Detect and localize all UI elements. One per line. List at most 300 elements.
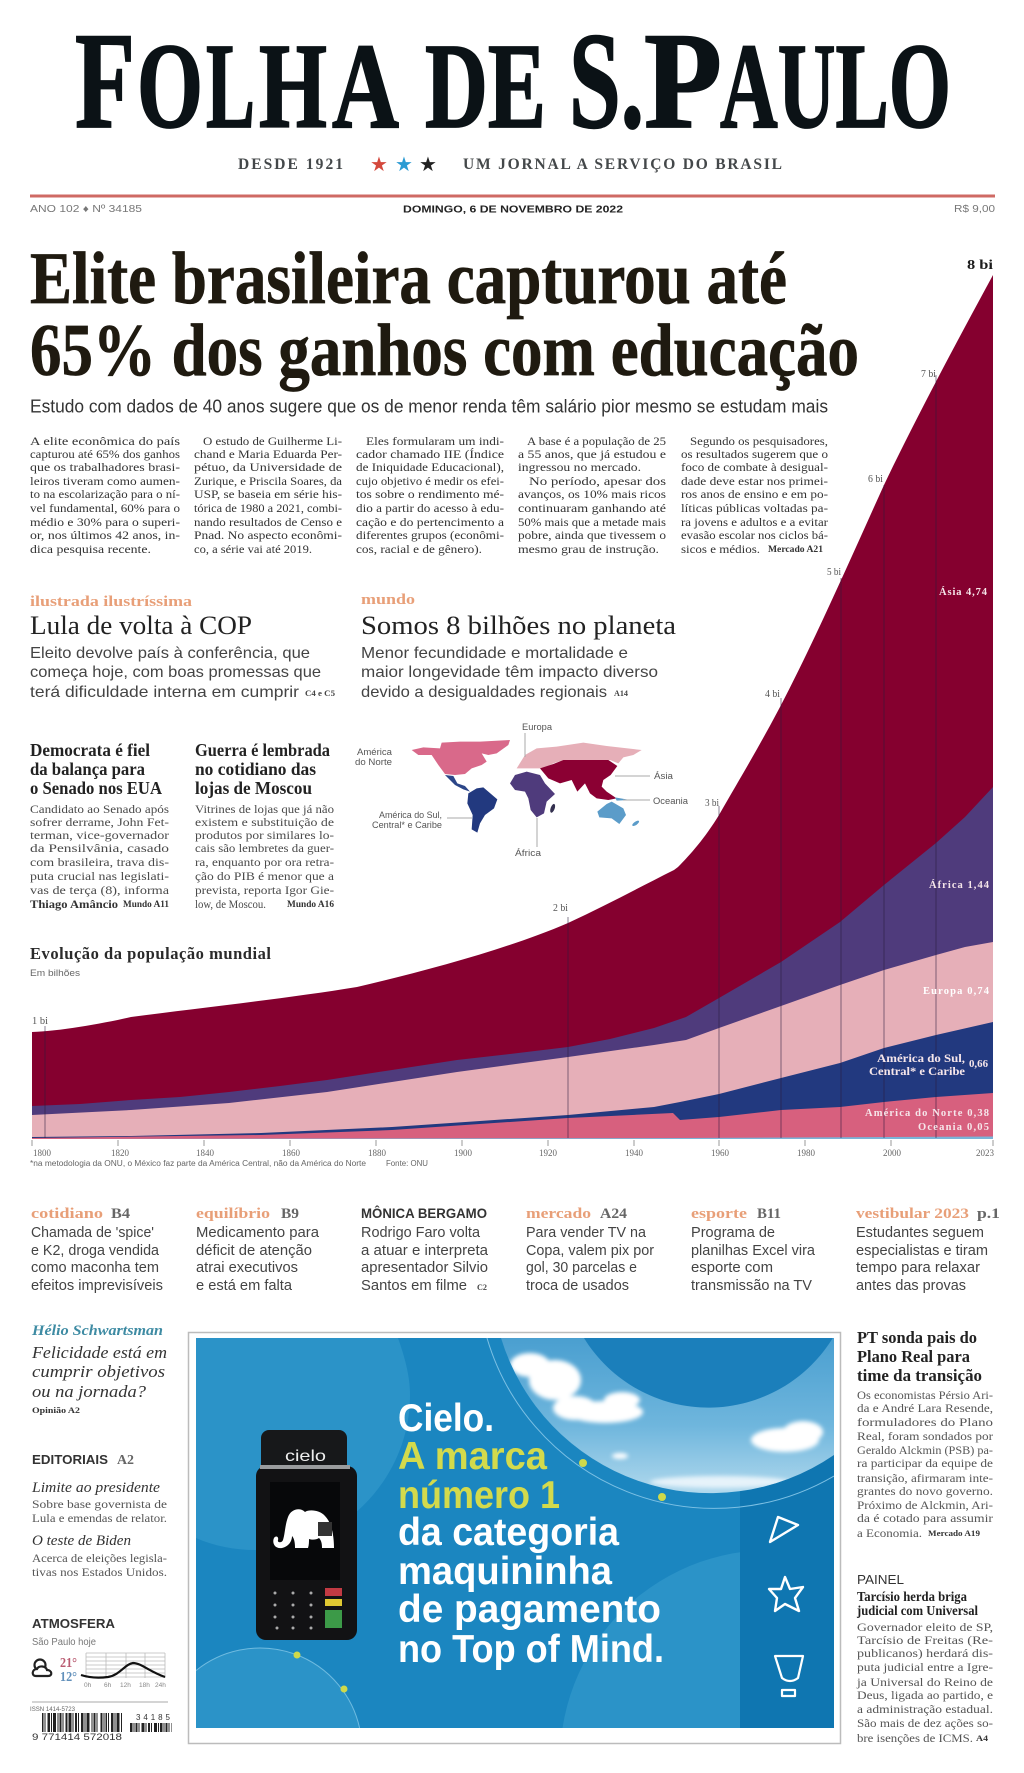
x axis year labels: 1860 (282, 1148, 300, 1158)
right column: Painel: São mais de dez ações so- (857, 1716, 993, 1730)
right column: Painel (856, 1572, 993, 1745)
brief: Mônica Bergamo: a atuar e interpreta (361, 1243, 489, 1259)
x axis year labels: 1840 (196, 1148, 214, 1158)
map continents (412, 740, 642, 833)
text column 3: tos sobre o rendimento mé- (356, 487, 504, 501)
text column 5 (681, 434, 828, 556)
story: Guerra Moscou: Vitrines de lojas que já não (195, 802, 334, 816)
story: Democrata Senado: vas de terça (8), informa (30, 883, 170, 897)
brief: mercado: A24 (600, 1206, 627, 1222)
terminal keypad (274, 1592, 312, 1630)
left column: editorials: Lula e emendas de relator. (32, 1511, 167, 1525)
main headline (30, 238, 859, 392)
left column: editorials: Limite ao presidente (31, 1480, 161, 1496)
text column 2: pétuo, da Universidade de (194, 460, 342, 474)
x axis year labels: 1980 (797, 1148, 816, 1158)
right column: PT story: time da transição (857, 1366, 982, 1385)
text column 5: ra jovens e adultos e a evitar (681, 515, 828, 529)
map region: Asia (540, 760, 617, 800)
text column 5: ros anos de ensino e em po- (681, 487, 828, 501)
decorative thin arc (487, 1338, 834, 1508)
billion marker labels (32, 257, 993, 1027)
icon: elephant (273, 1509, 334, 1548)
text column 2: tórica de 1980 a 2021, combi- (194, 501, 342, 515)
right column: PT story: Real, foram sondados por (857, 1429, 993, 1443)
weather panel: ATMOSFERA (32, 1616, 116, 1631)
temperature chart hours (84, 1682, 166, 1689)
barcode block: ISSN 1414-5723 (30, 1706, 75, 1713)
edition line: ANO 102 ♦ Nº 34185 (30, 204, 143, 215)
brief: cotidiano (31, 1206, 163, 1294)
story teaser: Lula COP: C4 e C5 (305, 689, 335, 698)
left column: editorials (31, 1452, 167, 1579)
icon: three stars: ★ (370, 152, 388, 176)
temperature chart hours: 24h (155, 1682, 166, 1689)
story: Democrata Senado: Candidato ao Senado após (30, 802, 169, 816)
brief: cotidiano: B4 (111, 1206, 130, 1222)
text column 3: cujo objetivo é medir os efei- (356, 474, 504, 488)
weather panel (32, 1616, 166, 1689)
ad headline: no Top of Mind. (398, 1628, 664, 1671)
story: Democrata Senado (30, 740, 170, 911)
right column: PT story (857, 1328, 993, 1540)
chart footnote and source: *na metodologia da ONU, o México faz parte da América Central, não da América do Norte (30, 1159, 367, 1168)
sky crescent with clouds (490, 1338, 840, 1498)
text column 5: os resultados sugerem que o (681, 447, 828, 461)
brief: esporte (691, 1206, 816, 1294)
story: Democrata Senado: com brasileira, trava dis- (30, 855, 169, 869)
brief: Mônica Bergamo: Rodrigo Faro volta (361, 1225, 481, 1241)
story: Guerra Moscou: cais são lembretes da guer- (195, 841, 334, 855)
left column: editorials: A2 (117, 1452, 134, 1467)
billion marker labels: 6 bi (868, 474, 883, 485)
ad dots (294, 1459, 666, 1692)
left column: opinion: ou na jornada? (32, 1382, 147, 1401)
billion marker labels: 4 bi (765, 689, 780, 700)
brief: esporte: B11 (757, 1206, 781, 1222)
brief: cotidiano: e K2, droga vendida (31, 1243, 160, 1259)
temperature chart grid (86, 1653, 165, 1678)
subheadline: Estudo com dados de 40 anos sugere que os de menor renda têm salário pior mesmo se estudam mais (30, 396, 828, 416)
text column 4: avanços, os 10% mais ricos (518, 487, 666, 501)
region value labels: Central* e Caribe (869, 1066, 965, 1078)
text column 2: O estudo de Guilherme Li- (203, 434, 342, 448)
left column: opinion: Felicidade está em (31, 1343, 167, 1362)
story: Guerra Moscou: prevista, reporta Igor Gie- (195, 883, 334, 897)
left column: opinion: Hélio Schwartsman (31, 1323, 163, 1339)
story: Democrata Senado: da balança para (30, 759, 145, 779)
story: Guerra Moscou: ra, enquanto por ora retra- (195, 855, 334, 869)
story: Democrata Senado: puta crucial nas legislati- (30, 869, 169, 883)
text column 5: dade deve estar nos primei- (681, 474, 828, 488)
text column 3: cação e do pertencimento a (356, 515, 505, 529)
text column 2: nando resultados de Censo e (194, 515, 342, 529)
masthead: tagline with stars: DESDE 1921 (238, 156, 343, 173)
left column: opinion: cumprir objetivos (32, 1362, 165, 1381)
map labels: Oceania (653, 796, 688, 806)
masthead: tagline with stars: UM JORNAL A SERVIÇO DO BRASIL (463, 156, 782, 173)
text column 3 (356, 434, 505, 556)
ad headline: de pagamento (398, 1588, 661, 1631)
text column 4: A base é a população de 25 (527, 434, 666, 448)
left column: opinion (31, 1323, 167, 1415)
text column 3: Eles formularam um indi- (366, 434, 504, 448)
chart: world population stacked area (32, 257, 994, 1158)
right column: PT story: da e André Lara Resende, (857, 1401, 993, 1415)
area: Asia (32, 275, 993, 1139)
right column: PT story: PT sonda pais do (857, 1328, 977, 1347)
left column: editorials: Acerca de eleições legisla- (32, 1551, 167, 1565)
left column: editorials: tivas nos Estados Unidos. (32, 1565, 167, 1579)
brief: Mônica Bergamo: Santos em filme (361, 1278, 467, 1294)
brief: equilíbrio: B9 (281, 1206, 299, 1222)
masthead: newspaper name: O (137, 19, 203, 154)
map region: Africa (510, 772, 555, 817)
story teaser: 8 billion (361, 592, 676, 701)
payment terminal: cielo (285, 1448, 326, 1465)
main headline: Elite brasileira capturou até (30, 238, 787, 320)
text column 5: líticas públicas voltadas pa- (681, 501, 828, 515)
text column 1: or, nos últimos 42 anos, in- (30, 528, 180, 542)
text column 3: cador chamado IIE (Índice (356, 447, 504, 461)
icon: three stars (370, 152, 437, 176)
story teaser: 8 billion: Somos 8 bilhões no planeta (361, 611, 676, 640)
right column: Painel: ja Universal do Reino de (856, 1675, 993, 1689)
ad headline: A marca (398, 1435, 547, 1478)
left column: editorials: EDITORIAIS (32, 1452, 108, 1467)
right column: Painel: A4 (976, 1733, 989, 1743)
region value labels: Oceania 0,05 (918, 1122, 989, 1133)
payment terminal (256, 1430, 357, 1640)
edition line: DOMINGO, 6 DE NOVEMBRO DE 2022 (403, 204, 623, 216)
masthead: newspaper name: H (259, 19, 327, 154)
temperature curve (81, 1663, 165, 1678)
text column 3: de Iniquidade Educacional), (356, 460, 504, 474)
map region: Madagascar (549, 803, 556, 813)
text column 1: que os trabalhadores brasi- (30, 460, 180, 474)
text column 2: USP, se baseia em série his- (194, 487, 342, 501)
barcode block: 34185 (136, 1713, 171, 1722)
icon: three stars: ★ (419, 152, 437, 176)
map labels (355, 722, 688, 858)
brief: Mônica Bergamo (361, 1206, 489, 1294)
ad headline (398, 1397, 664, 1671)
region value labels (865, 586, 990, 1133)
text column 5: Segundo os pesquisadores, (690, 434, 828, 448)
map labels: América (357, 747, 392, 757)
masthead: newspaper name: L (206, 19, 255, 154)
right column: Painel: bre isenções de ICMS. (857, 1731, 973, 1745)
x axis year labels: 1880 (368, 1148, 386, 1158)
text column 3: dio a partir do acesso à edu- (356, 501, 504, 515)
text column 4: ingressou no mercado. (518, 460, 641, 474)
chart footnote and source: Fonte: ONU (386, 1159, 428, 1168)
story: Democrata Senado: Mundo A11 (123, 899, 169, 909)
right column: Painel: judicial com Universal (856, 1603, 978, 1618)
terminal screen (270, 1482, 340, 1580)
story: Democrata Senado: Democrata é fiel (30, 740, 150, 760)
x axis year labels: 1960 (711, 1148, 730, 1158)
text column 3: cos, racial e de gênero). (356, 542, 482, 556)
x axis year labels (33, 1148, 994, 1158)
billion marker labels: 3 bi (705, 798, 719, 809)
icon: star (769, 1577, 803, 1611)
masthead: newspaper name (75, 4, 951, 157)
x axis year labels: 2000 (883, 1148, 902, 1158)
map region: North America (412, 740, 510, 775)
ad headline: maquininha (398, 1550, 612, 1593)
masthead divider (30, 194, 995, 198)
story teaser: 8 billion: maior longevidade têm impacto diverso (361, 664, 658, 681)
region value labels: África 1,44 (929, 879, 990, 891)
billion marker labels: 8 bi (967, 257, 993, 272)
temperatures: 12° (60, 1670, 77, 1685)
right column: PT story: a Economia. (857, 1526, 922, 1540)
region value labels: 0,66 (969, 1059, 988, 1070)
x axis year labels: 1820 (111, 1148, 130, 1158)
edition line (30, 204, 996, 216)
map labels: África (515, 848, 541, 858)
story: Guerra Moscou: no cotidiano das (195, 759, 316, 779)
right column: Painel: PAINEL (857, 1572, 904, 1587)
brief: mercado: Copa, valem pix por (526, 1243, 654, 1259)
chart title (30, 944, 271, 979)
right column: Painel: Governador eleito de SP, (857, 1620, 993, 1634)
map labels: Central* e Caribe (372, 820, 442, 830)
right column: Painel: publicanos) herdará dis- (857, 1646, 993, 1660)
map labels: Ásia (654, 771, 673, 781)
text column 4 (518, 434, 666, 556)
map region: Europe (517, 743, 642, 768)
x axis ticks (32, 1140, 993, 1146)
text column 4: 50% mais que a metade mais (518, 515, 666, 529)
billion marker lines (45, 375, 936, 1138)
brief: esporte: Programa de (691, 1225, 775, 1241)
brief: cotidiano: Chamada de 'spice' (31, 1225, 154, 1241)
area: South and Central America (32, 1022, 993, 1139)
brief: equilíbrio (196, 1206, 320, 1294)
story: Guerra Moscou: produtos por similares lo- (195, 828, 334, 842)
text column 4: mesmo grau de instrução. (518, 542, 659, 556)
region value labels: América do Sul, (877, 1053, 965, 1065)
map labels: do Norte (355, 757, 392, 767)
right column: PT story: Geraldo Alckmin (PSB) pa- (857, 1443, 993, 1457)
text column 1: dica pesquisa recente. (30, 542, 151, 556)
right column: Painel: Tarcísio herda briga (857, 1589, 967, 1604)
text column 2: Pnad. No aspecto econômi- (194, 528, 342, 542)
map labels: América do Sul, (379, 810, 442, 820)
brief: mercado: mercado (526, 1206, 591, 1222)
advertisement: Cielo (188, 1330, 840, 1744)
text column 2: Zurique, e Priscila Soares, da (194, 474, 343, 488)
weather panel: São Paulo hoje (32, 1637, 96, 1648)
brief: mercado: troca de usados (526, 1278, 629, 1294)
brief: cotidiano: efeitos imprevisíveis (31, 1278, 163, 1294)
story teaser: Lula COP: Eleito devolve país à conferência, que (30, 645, 310, 662)
icon: glass (775, 1656, 803, 1696)
x axis year labels: 1940 (625, 1148, 644, 1158)
edition line: R$ 9,00 (954, 204, 996, 215)
text column 4: continuaram ganhando até (518, 501, 666, 515)
right column: PT story: grantes do novo governo. (857, 1484, 993, 1498)
story: Democrata Senado: o Senado nos EUA (30, 778, 162, 798)
right column: PT story: ra participar da equipe de (857, 1456, 993, 1470)
brief: mercado (526, 1206, 654, 1294)
story: Guerra Moscou: ção do PIB é menor que a (195, 869, 335, 883)
billion marker labels: 5 bi (827, 567, 841, 578)
region value labels: Ásia 4,74 (939, 586, 988, 598)
text column 3: diferentes grupos (econômi- (356, 528, 504, 542)
brief: esporte: esporte com (691, 1260, 773, 1276)
brief: esporte: esporte (691, 1206, 748, 1222)
billion marker labels: 7 bi (921, 369, 936, 380)
left column: opinion: Opinião A2 (32, 1405, 80, 1415)
right column: PT story: Mercado A19 (928, 1528, 980, 1538)
ad headline: número 1 (398, 1474, 560, 1517)
brief: cotidiano: cotidiano (31, 1206, 103, 1222)
right column: PT story: Os economistas Pérsio Ari- (857, 1388, 993, 1402)
right column: Painel: puta judicial entre a Igre- (857, 1660, 993, 1674)
story: Guerra Moscou: lojas de Moscou (195, 778, 312, 798)
text column 1: A elite econômica do país (30, 434, 180, 448)
brief: cotidiano: como maconha tem (31, 1260, 159, 1276)
area: North America (32, 1093, 993, 1139)
text column 2: chand e Maria Eduarda Per- (194, 447, 342, 461)
ad headline: da categoria (398, 1511, 619, 1554)
billion marker labels: 2 bi (553, 903, 568, 914)
story: Guerra Moscou: low, de Moscou. (195, 897, 266, 911)
story teaser: Lula COP: Lula de volta à COP (30, 611, 252, 640)
masthead: newspaper name: P (644, 4, 722, 157)
barcode bars (42, 1713, 122, 1732)
area: Europe (32, 942, 993, 1139)
brief: vestibular (856, 1206, 1000, 1294)
story: Democrata Senado: da Pensilvânia, casado (30, 841, 169, 855)
text column 2: co, a série vai até 2019. (194, 542, 312, 556)
map leader lines (447, 733, 650, 847)
temperature chart hours: 12h (120, 1682, 131, 1689)
x axis year labels: 1920 (539, 1148, 558, 1158)
story: Guerra Moscou: Mundo A16 (287, 899, 335, 909)
right column: Painel: Deus, ligada ao partido, e (857, 1688, 993, 1702)
brief: mercado: gol, 30 parcelas e (526, 1260, 637, 1276)
text column 1: médio e 30% para o superi- (30, 515, 180, 529)
temperature chart hours: 6h (104, 1682, 112, 1689)
text column 1 (30, 434, 180, 556)
x axis year labels: 1900 (454, 1148, 472, 1158)
left column: editorials: O teste de Biden (32, 1533, 131, 1549)
ad border (188, 1332, 840, 1744)
masthead: newspaper name: A (332, 19, 399, 154)
text column 5: foco de combate à desigual- (681, 460, 828, 474)
temperature chart hours: 18h (139, 1682, 150, 1689)
text column 4: a 55 anos, que já estudou e (518, 447, 666, 461)
masthead: newspaper name: DE (425, 19, 546, 154)
brief: vestibular: especialistas e tiram (856, 1243, 988, 1259)
brief: Mônica Bergamo: C2 (477, 1283, 487, 1292)
brief: esporte: transmissão na TV (691, 1278, 812, 1294)
map region: Oceania (597, 797, 640, 827)
story: Guerra Moscou: Guerra é lembrada (195, 740, 330, 760)
story teaser: Lula COP (30, 594, 335, 701)
text column 1: to na escolarização para o ní- (30, 487, 180, 501)
chart title: Em bilhões (30, 968, 80, 979)
text column 2 (194, 434, 343, 556)
right column: PT story: transição, afirmaram inte- (857, 1471, 993, 1485)
icon: three stars: ★ (395, 152, 413, 176)
brief: Mônica Bergamo: MÔNICA BERGAMO (361, 1206, 487, 1221)
temperature chart hours: 0h (84, 1682, 92, 1689)
lead story body text (30, 434, 828, 556)
area: Oceania (32, 1136, 993, 1139)
story teaser: 8 billion: A14 (614, 689, 628, 698)
temperatures: 21° (60, 1656, 77, 1671)
masthead: newspaper name: S. (569, 4, 644, 157)
main headline: 65% dos ganhos com educação (30, 310, 859, 392)
right column: Painel: a administração estadual. (857, 1702, 993, 1716)
region value labels: América do Norte 0,38 (865, 1108, 989, 1119)
brief: mercado: Para vender TV na (526, 1225, 647, 1241)
chart title: Evolução da população mundial (30, 944, 271, 963)
story teaser: 8 billion: Menor fecundidade e mortalidade e (361, 645, 628, 662)
world map with regions (355, 722, 688, 858)
brief: vestibular: p.1 (977, 1206, 1000, 1222)
ad headline: Cielo. (398, 1397, 494, 1440)
story: Guerra Moscou: existem e substituição de (195, 815, 334, 829)
text column 5: Mercado A21 (768, 544, 824, 554)
brief: esporte: planilhas Excel vira (691, 1243, 816, 1259)
brief: Mônica Bergamo: apresentador Silvio (361, 1260, 488, 1276)
ad background artwork (196, 1330, 840, 1728)
text column 5: sicos e médios. (681, 542, 760, 556)
region value labels: Europa 0,74 (923, 986, 990, 997)
text column 1: leiros tiveram como aumen- (30, 474, 180, 488)
brief row (31, 1206, 1000, 1294)
x axis year labels: 1800 (33, 1148, 52, 1158)
barcode block: 9 771414 572018 (32, 1732, 122, 1742)
story teaser: 8 billion: mundo (361, 592, 415, 608)
left column: editorials: Sobre base governista de (32, 1497, 167, 1511)
story: Guerra Moscou (195, 740, 335, 911)
temperatures (60, 1656, 77, 1685)
masthead: tagline with stars (238, 152, 782, 176)
right column: PT story: da é cotado para assumir (857, 1511, 993, 1525)
text column 4: pobre, ainda que tivessem o (518, 528, 666, 542)
text column 1: vel fundamental, 60% para o (30, 501, 180, 515)
map region: Central America (445, 775, 470, 792)
icon: party cone (770, 1517, 798, 1542)
right column: PT story: Plano Real para (857, 1347, 970, 1366)
billion marker labels: 1 bi (32, 1016, 48, 1027)
right column: PT story: formuladores do Plano (857, 1415, 993, 1429)
masthead: newspaper name: F (75, 4, 135, 157)
right column: PT story: Próximo de Alckmin, Ari- (857, 1498, 993, 1512)
brief: vestibular: vestibular 2023 (856, 1206, 969, 1222)
brief: vestibular: Estudantes seguem (856, 1225, 984, 1241)
brief: equilíbrio: equilíbrio (196, 1206, 270, 1222)
story: Democrata Senado: sofrer derrame, John Fet- (30, 815, 169, 829)
brief: equilíbrio: Medicamento para (196, 1225, 320, 1241)
brief: equilíbrio: déficit de atenção (196, 1243, 312, 1259)
text column 4: No período, apesar dos (529, 474, 666, 488)
brief: equilíbrio: atrai executivos (196, 1260, 298, 1276)
story teaser: 8 billion: devido a desigualdades regionais (361, 684, 607, 701)
brief: equilíbrio: e está em falta (196, 1278, 293, 1294)
text column 1: capturou até 65% dos ganhos (30, 447, 180, 461)
icon: sun and cloud (33, 1660, 51, 1676)
area: Africa (32, 787, 993, 1139)
story teaser: Lula COP: terá dificuldade interna em cumprir (30, 684, 300, 701)
